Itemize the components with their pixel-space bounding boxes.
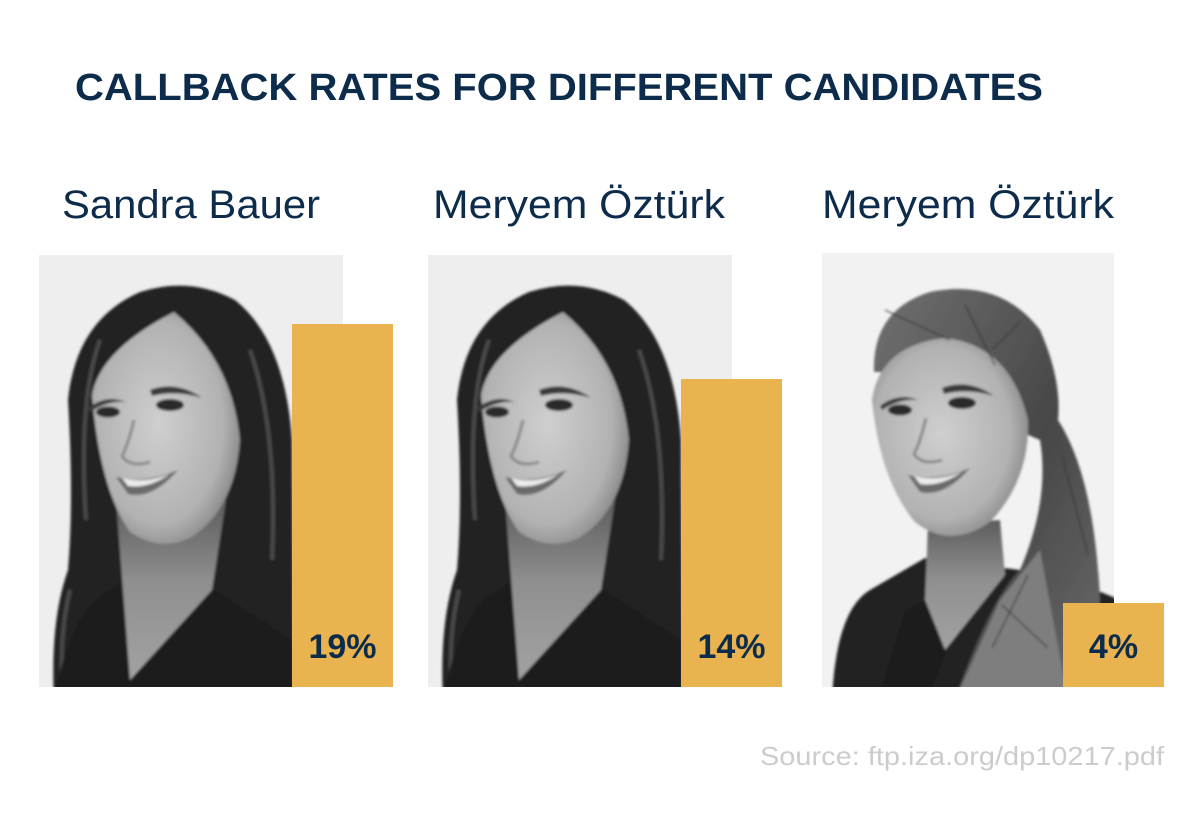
value: 19%: 19%: [308, 628, 377, 666]
bar: 4%: [1063, 603, 1164, 687]
candidate name: Meryem Öztürk: Meryem Öztürk: [433, 183, 726, 227]
panel: Sandra Bauer 19%: [39, 183, 393, 700]
portrait: woman with loose hair: [428, 255, 732, 700]
portrait: woman with headscarf: [822, 253, 1120, 700]
portrait: woman with loose hair: [39, 255, 343, 700]
candidate name: Sandra Bauer: Sandra Bauer: [62, 183, 320, 227]
bar: 14%: [681, 379, 782, 687]
candidate name: Meryem Öztürk: Meryem Öztürk: [822, 183, 1115, 227]
title: CALLBACK RATES FOR DIFFERENT CANDIDATES: [75, 67, 1043, 109]
value: 14%: 14%: [697, 628, 766, 666]
value: 4%: 4%: [1089, 628, 1138, 666]
panel: Meryem Öztürk 14%: [428, 183, 782, 700]
source note: Source: ftp.iza.org/dp10217.pdf: [760, 741, 1165, 771]
panel: Meryem Öztürk with headscarf 4%: [822, 183, 1164, 700]
bar: 19%: [292, 324, 393, 687]
